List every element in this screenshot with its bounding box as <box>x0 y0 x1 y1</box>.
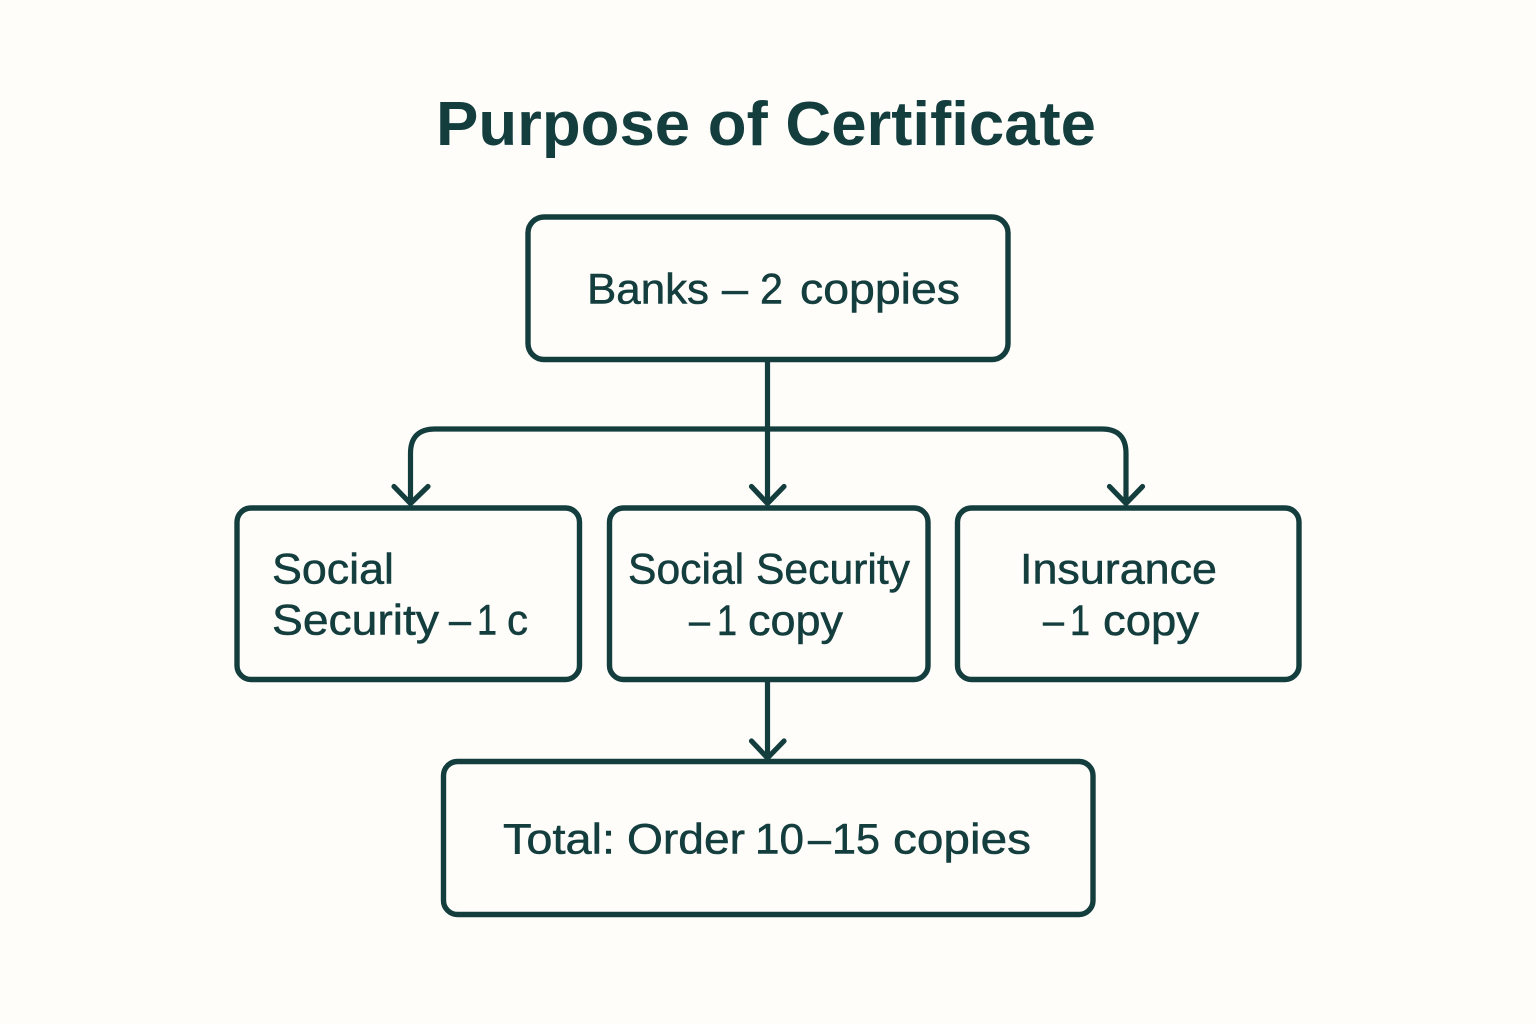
box: banks: coppies <box>800 266 960 314</box>
box: social security middle <box>610 508 928 680</box>
box: social security left: c <box>507 596 528 644</box>
box: total: 10 <box>755 816 804 864</box>
box: insurance: 1 <box>1070 597 1090 645</box>
box: insurance <box>958 508 1299 680</box>
box: social security left <box>237 508 580 680</box>
box: social security middle: – <box>689 597 710 645</box>
box: banks: 2 <box>760 266 783 314</box>
box: total <box>444 762 1093 914</box>
arrow: center from banks to middle box <box>752 360 784 504</box>
box: banks: Banks <box>587 266 709 314</box>
arrow: middle box to total <box>752 680 784 758</box>
box: social security middle: Social Security <box>628 546 910 594</box>
box: social security left: Security <box>272 596 440 644</box>
box: social security middle: copy <box>748 597 844 645</box>
box: insurance: Insurance <box>1020 546 1217 594</box>
arrow: branch left <box>394 429 767 504</box>
box: banks <box>528 217 1008 360</box>
box: insurance: copy <box>1103 597 1200 645</box>
box: banks: – <box>722 266 748 314</box>
box: total: 15 <box>832 816 880 864</box>
box: total: – <box>808 816 831 864</box>
box: insurance: – <box>1043 597 1064 645</box>
box: social security middle: 1 <box>717 597 737 645</box>
box: social security left: Social <box>272 546 394 594</box>
box: total: copies <box>893 816 1031 864</box>
arrow: branch right <box>767 429 1142 504</box>
title: Purpose of Certificate <box>436 90 1096 159</box>
box: social security left: – <box>449 596 471 644</box>
box: social security left: 1 <box>477 596 497 644</box>
box: total: Total: <box>503 816 615 864</box>
box: total: Order <box>627 816 745 864</box>
